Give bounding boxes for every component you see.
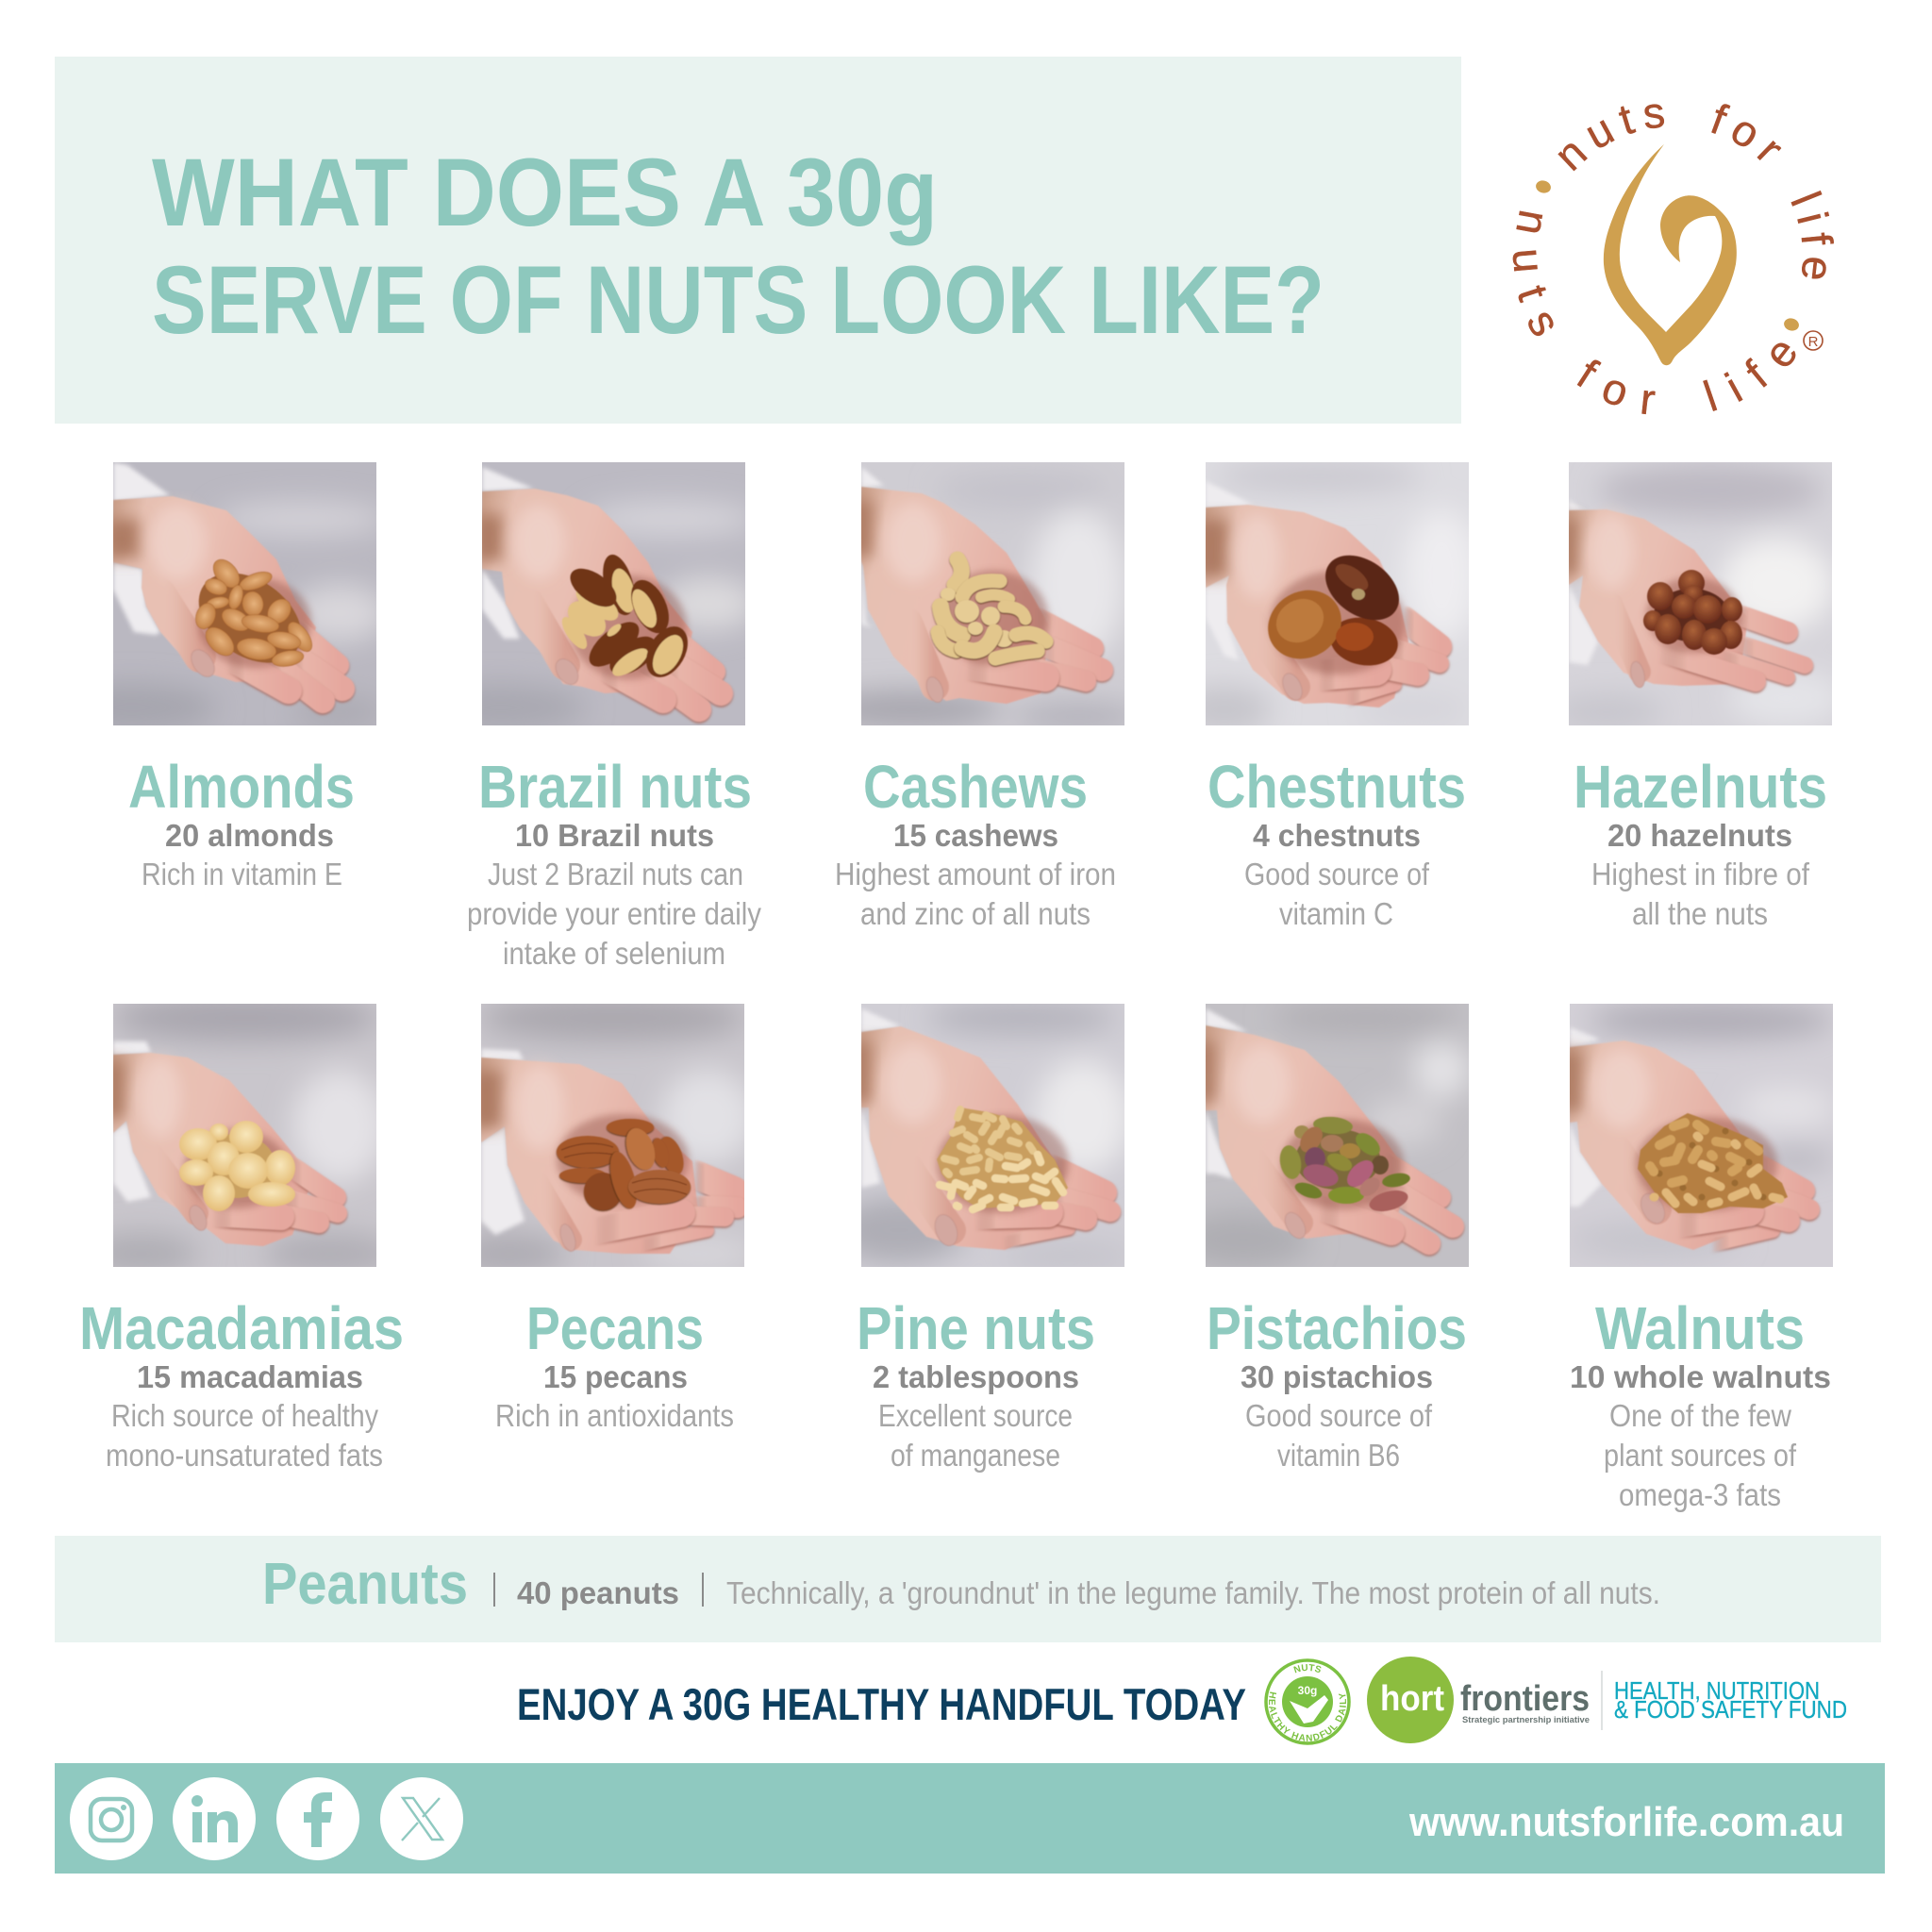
benefit: plant sources of [1604, 1438, 1797, 1473]
benefit [835, 857, 1116, 931]
logo: hort frontiers: hort [1380, 1679, 1444, 1719]
benefit [1591, 857, 1810, 931]
icon: instagram [70, 1777, 153, 1860]
footer bar [55, 1763, 1885, 1874]
name: Cashews [863, 753, 1088, 821]
peanuts serve: 40 peanuts [517, 1575, 679, 1610]
name: Pistachios [1207, 1294, 1467, 1362]
serve size: 30 pistachios [1241, 1359, 1433, 1394]
serve size: 2 tablespoons [873, 1359, 1079, 1394]
benefit: Excellent source [878, 1398, 1073, 1433]
title: SERVE OF NUTS LOOK LIKE? [152, 246, 1324, 354]
serve size: 10 whole walnuts [1570, 1359, 1831, 1394]
benefit: mono-unsaturated fats [106, 1438, 383, 1473]
serve size: 20 almonds [165, 818, 334, 853]
benefit: Just 2 Brazil nuts can [488, 857, 743, 891]
benefit [1604, 1398, 1797, 1512]
card: walnuts [1558, 1002, 1834, 1512]
benefit: and zinc of all nuts [860, 896, 1091, 931]
benefit [106, 1398, 383, 1473]
logo: hort frontiers: Strategic partnership initiative [1462, 1715, 1590, 1724]
name: Pecans [526, 1294, 704, 1362]
benefit: Good source of [1245, 1398, 1433, 1433]
name: Hazelnuts [1574, 753, 1827, 821]
benefit: Highest in fibre of [1591, 857, 1810, 891]
serve size: 15 pecans [543, 1359, 688, 1394]
photo: pine nuts in hand [861, 1004, 1124, 1267]
photo: hazelnuts in hand [1569, 462, 1832, 725]
name: Walnuts [1595, 1294, 1805, 1362]
serve size: 15 macadamias [137, 1359, 363, 1394]
health nutrition fund label: HEALTH, NUTRITION [1614, 1676, 1820, 1705]
photo: chestnuts in hand [1206, 462, 1469, 725]
benefit: Rich source of healthy [111, 1398, 378, 1433]
benefit: vitamin B6 [1277, 1438, 1400, 1473]
card: almonds [47, 462, 387, 891]
name: Macadamias [79, 1294, 404, 1362]
benefit: Rich in vitamin E [142, 857, 342, 891]
title: WHAT DOES A 30g [152, 139, 938, 246]
benefit: provide your entire daily [467, 896, 761, 931]
serve size: 10 Brazil nuts [515, 818, 714, 853]
benefit [878, 1398, 1073, 1473]
title [152, 139, 1324, 354]
icon: x [380, 1777, 463, 1860]
photo: brazil nuts in hand [482, 462, 745, 725]
photo: walnuts in hand [1570, 1004, 1833, 1267]
badge: 30g healthy handful daily [1264, 1658, 1351, 1745]
photo: pecans in hand [481, 1004, 744, 1267]
benefit [467, 857, 761, 971]
serve size: 15 cashews [893, 818, 1058, 853]
logo: nuts for life: nuts for life [1557, 104, 1834, 279]
card: pecans [453, 994, 755, 1433]
benefit [1244, 857, 1430, 931]
card: pine nuts [833, 1001, 1135, 1473]
logo: nuts for life: R [1808, 334, 1819, 350]
call to action: ENJOY A 30G HEALTHY HANDFUL TODAY [517, 1679, 1246, 1729]
logo: nuts for life [1513, 104, 1834, 415]
photo: macadamias in hand [113, 1004, 376, 1267]
logo: hort frontiers [1367, 1657, 1590, 1743]
card: pistachios [1177, 1001, 1470, 1473]
benefit: Rich in antioxidants [495, 1398, 734, 1433]
benefit: all the nuts [1632, 896, 1768, 931]
photo: cashews in hand [861, 462, 1124, 725]
benefit: intake of selenium [503, 936, 725, 971]
name: Pine nuts [857, 1294, 1095, 1362]
logo: hort frontiers: frontiers [1460, 1679, 1590, 1719]
peanuts name: Peanuts [262, 1552, 468, 1617]
card: brazil nuts [416, 462, 761, 971]
benefit: omega-3 fats [1619, 1477, 1781, 1512]
card: chestnuts [1177, 459, 1479, 931]
name: Almonds [128, 753, 355, 821]
logo: nuts for life: nuts for life [1513, 211, 1796, 415]
benefit: One of the few [1609, 1398, 1791, 1433]
photo: pistachios in hand [1206, 1004, 1469, 1267]
benefit: Highest amount of iron [835, 857, 1116, 891]
benefit [1245, 1398, 1433, 1473]
card: macadamias [79, 994, 404, 1473]
icon: facebook [276, 1777, 359, 1860]
badge: 30g healthy handful daily: NUTS [1293, 1664, 1321, 1674]
benefit: of manganese [891, 1438, 1060, 1473]
health nutrition fund label: & FOOD SAFETY FUND [1614, 1695, 1847, 1724]
panel: peanuts [55, 1536, 1881, 1642]
badge: 30g healthy handful daily: 30g [1298, 1684, 1317, 1697]
website url: www.nutsforlife.com.au [1408, 1799, 1844, 1845]
benefit: Good source of [1244, 857, 1430, 891]
serve size: 20 hazelnuts [1607, 818, 1792, 853]
header panel [55, 57, 1461, 424]
card: cashews [814, 462, 1144, 931]
peanuts description: Technically, a 'groundnut' in the legume family. The most protein of all nuts. [726, 1575, 1660, 1610]
name: Chestnuts [1208, 753, 1466, 821]
card: hazelnuts [1550, 462, 1842, 931]
serve size: 4 chestnuts [1253, 818, 1421, 853]
badge: 30g healthy handful daily: HEALTHY HANDFUL DAILY [1269, 1691, 1346, 1741]
icon: linkedin [173, 1777, 256, 1860]
photo: almonds in hand [113, 462, 376, 725]
benefit: vitamin C [1279, 896, 1393, 931]
health nutrition fund label [1614, 1676, 1847, 1724]
name: Brazil nuts [478, 753, 752, 821]
